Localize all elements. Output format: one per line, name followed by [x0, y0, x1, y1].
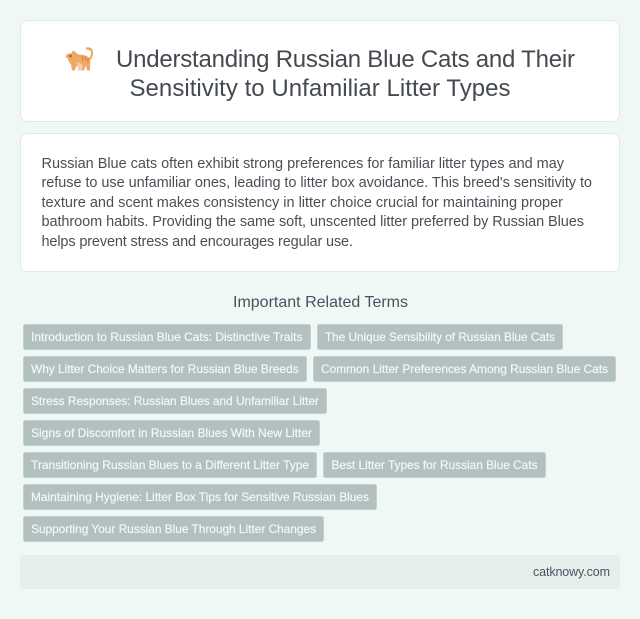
- chip: Why Litter Choice Matters for Russian Blue Breeds: [31, 362, 298, 376]
- chip: [24, 356, 306, 382]
- text block: description: refuse to use unfamiliar ones, leading to litter box avoidance. This breed's sensitivity to: [42, 175, 592, 191]
- footer credit: catknowy.com: [533, 565, 610, 579]
- chip: Maintaining Hygiene: Litter Box Tips for Sensitive Russian Blues: [31, 490, 369, 504]
- title: Sensitivity to Unfamiliar Litter Types: [130, 75, 510, 102]
- text block: description: [42, 156, 592, 250]
- chip: Common Litter Preferences Among Russian Blue Cats: [321, 362, 608, 376]
- chip: Transitioning Russian Blues to a Different Litter Type: [31, 458, 309, 472]
- chip: [24, 324, 310, 350]
- text block: description: texture and scent makes consistency in litter choice crucial for maintaining proper: [42, 195, 563, 211]
- chip: Supporting Your Russian Blue Through Litter Changes: [31, 522, 316, 536]
- chip: Stress Responses: Russian Blues and Unfamiliar Litter: [31, 394, 319, 408]
- chip: [24, 388, 326, 414]
- chip: [24, 452, 316, 478]
- panel: title card: [20, 20, 620, 122]
- chip: Introduction to Russian Blue Cats: Distinctive Traits: [31, 330, 302, 344]
- text block: description: Russian Blue cats often exhibit strong preferences for familiar litter types and may: [42, 156, 565, 172]
- chip: Signs of Discomfort in Russian Blues With New Litter: [31, 426, 312, 440]
- chip: [318, 324, 562, 350]
- text block: description: bathroom habits. Providing the same soft, unscented litter preferred by Russian Blues: [42, 214, 584, 230]
- chip: The Unique Sensibility of Russian Blue Cats: [325, 330, 555, 344]
- icon: cat: [66, 47, 93, 70]
- footer: [20, 555, 620, 589]
- heading: related terms: Important Related Terms: [233, 294, 408, 311]
- title: Understanding Russian Blue Cats and Their: [116, 46, 575, 73]
- chip: [324, 452, 546, 478]
- panel: description: [20, 134, 620, 272]
- chip: [24, 484, 376, 510]
- chip: [314, 356, 616, 382]
- chip: [24, 420, 320, 446]
- chip: [24, 516, 324, 542]
- text block: description: helps prevent stress and encourages regular use.: [42, 234, 353, 250]
- chip list: [24, 324, 616, 542]
- title: [116, 46, 575, 102]
- chip: Best Litter Types for Russian Blue Cats: [332, 458, 538, 472]
